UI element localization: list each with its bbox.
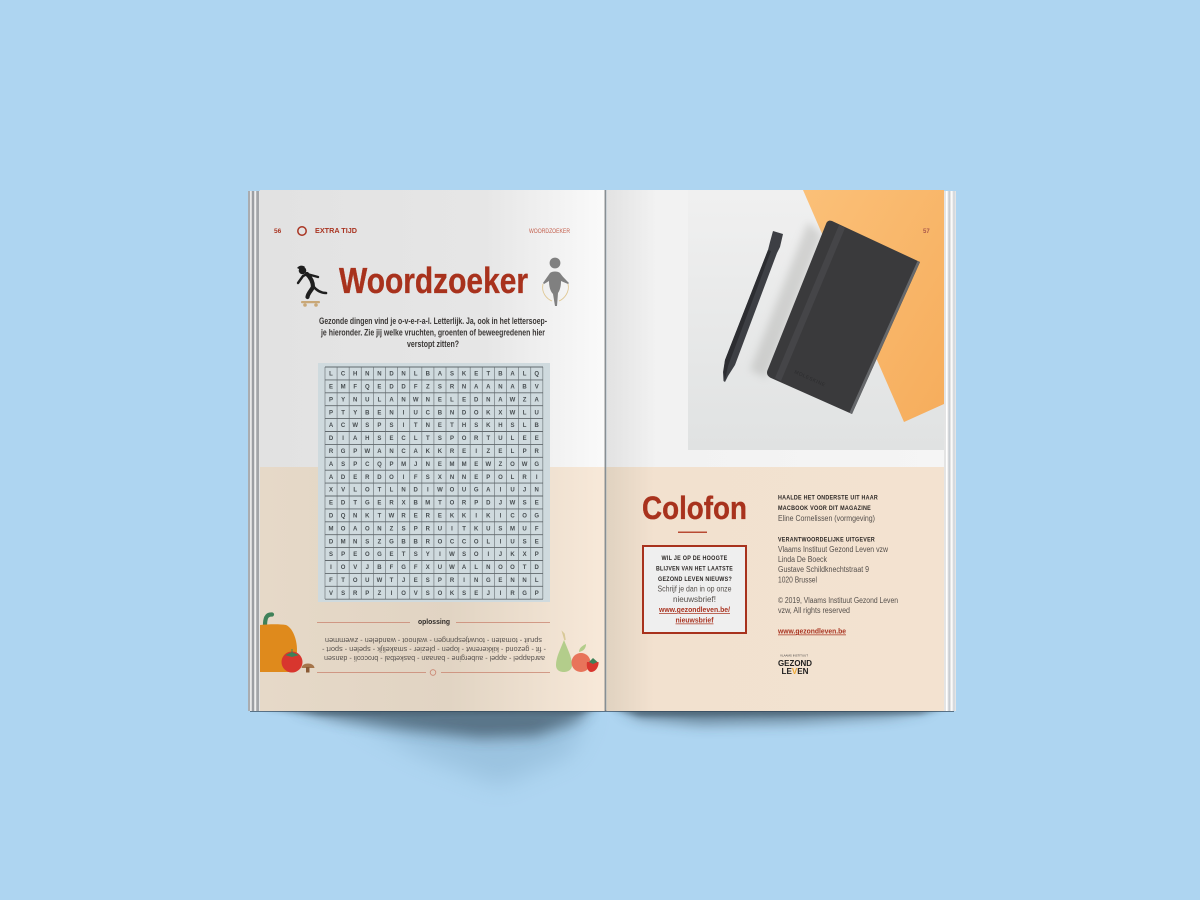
notebook (767, 221, 920, 414)
page background (606, 190, 944, 711)
word search grid: ASPCQPMJNEMMEWZOWG (329, 462, 539, 468)
bottom ornament (317, 670, 550, 675)
word search grid: ACWSPSITNETHSKHSLB (329, 423, 540, 429)
word search grid: RGPWANCAKKREIZELPR (329, 449, 540, 455)
word search grid: XVLOTLNDIWOUGAIUJN (329, 488, 539, 494)
credits: colophon text: © 2019, Vlaams Instituut Gezond Leven (778, 596, 898, 605)
logo: Gezond Leven (778, 654, 812, 676)
word search grid: SPEOGETSYIWSOIJKXP (329, 552, 539, 558)
page edges right (944, 191, 956, 711)
word search grid: EMFQEDDFZSRNAANABV (329, 384, 539, 390)
callout: newsletter (643, 546, 746, 633)
intro text: Gezonde dingen vind je o-v-e-r-a-l. Letterlijk. Ja, ook in het lettersoep- (319, 316, 547, 326)
heading: Colofon: Colofon (642, 490, 747, 526)
word search grid: PYNULANWNELEDNAWZA (329, 397, 540, 403)
photo: notebook and pen (688, 190, 944, 450)
word search grid: LCHNNDNLBASKETBALQ (329, 372, 539, 378)
page background (260, 190, 605, 711)
word search grid (318, 363, 550, 602)
word search grid: DMNSZGBBROCCOLIUSE (329, 539, 539, 545)
page header: 56 (274, 228, 282, 235)
page header: WOORDZOEKER (529, 229, 571, 235)
credits: colophon text: Gustave Schildknechtstraat 9 (778, 565, 869, 574)
callout: newsletter: Schrijf je dan in op onze (658, 584, 732, 594)
word search grid: EDTGERXBMTORPDJWSE (329, 501, 539, 507)
icon: rope jumper (543, 258, 569, 306)
callout: newsletter: WIL JE OP DE HOOGTE (662, 555, 728, 562)
credits: colophon text: 1020 Brussel (778, 576, 817, 584)
solution text upside down (322, 636, 546, 663)
credits: colophon text: Vlaams Instituut Gezond Leven vzw (778, 545, 888, 554)
pen (723, 231, 783, 382)
book shadow (250, 708, 954, 785)
heading underline (678, 532, 707, 533)
word search grid: DIAHSECLTSPORTULEE (329, 436, 539, 442)
word search grid: FTOUWTJESPRINGENNL (329, 578, 539, 584)
notebook: MOLESKINE (793, 369, 827, 389)
logo: Gezond Leven: GEZOND (778, 659, 812, 668)
icon: pumpkin, tomato, mushroom (260, 614, 314, 672)
title: Woordzoeker (339, 260, 528, 301)
solution text upside down: spruit - tomaten - touwtjespringen - walnoot - wandelen - zwemmen (325, 636, 542, 645)
credits: colophon text (777, 494, 898, 636)
icon: skateboarder (297, 266, 326, 307)
credits: colophon text: vzw, All rights reserved (778, 606, 850, 615)
credits: colophon text: Linda De Boeck (778, 555, 828, 564)
word search grid: MOAONZSPRUITKUSMUF (328, 526, 539, 532)
icon: pear, apple, strawberry (556, 633, 599, 672)
orange paper (803, 190, 944, 422)
credits: colophon text: VERANTWOORDELIJKE UITGEVER (778, 536, 875, 544)
word search grid: PTYBENIUCBNDOKXWLU (329, 410, 539, 416)
page header: EXTRA TIJD (315, 226, 357, 235)
panel: left page (248, 190, 606, 711)
panel: right page (606, 190, 956, 711)
credits: colophon text: HAALDE HET ONDERSTE UIT HAAR (778, 494, 878, 502)
credits: colophon text: www.gezondleven.be (777, 626, 846, 636)
credits: colophon text: MACBOOK VOOR DIT MAGAZINE (778, 505, 871, 512)
word search grid: ADERDOIFSXNNEPOLRI (329, 475, 538, 481)
solution text upside down: aardappel - appel - aubergine - banaan - basketbal - broccoli - dansen (324, 654, 545, 663)
intro text: verstopt zitten? (407, 339, 459, 349)
callout: newsletter: nieuwsbrief! (673, 595, 716, 604)
intro text (319, 316, 547, 349)
page header (274, 226, 571, 235)
logo: Gezond Leven: LEVEN (782, 667, 809, 676)
solution text upside down: - fit - gezond - kikkererwt - lopen - plezier - smakelijk - spelen - sport - (322, 645, 546, 654)
intro text: je hieronder. Zie jij welke vruchten, groenten of beweegredenen hier (320, 328, 545, 338)
credits: colophon text: Eline Cornelissen (vormgeving) (778, 514, 875, 523)
page edges left (248, 191, 261, 711)
photo: notebook and pen: 57 (923, 229, 930, 235)
word search grid: IOVJBFGFXUWALNOOTD (330, 565, 540, 571)
callout: newsletter: nieuwsbrief (676, 616, 714, 624)
callout: newsletter: BLIJVEN VAN HET LAATSTE (656, 566, 733, 572)
word search grid: DQNKTWREREKKIKICOG (329, 514, 539, 520)
word search grid: VSRPZIOVSOKSEJIRGP (329, 591, 539, 597)
callout: newsletter: GEZOND LEVEN NIEUWS? (658, 576, 732, 583)
callout: newsletter: www.gezondleven.be/ (658, 605, 730, 614)
logo: Gezond Leven: VLAAMS INSTITUUT (780, 654, 808, 658)
solution heading: oplossing (418, 619, 450, 626)
spine shadow left (604, 190, 606, 711)
